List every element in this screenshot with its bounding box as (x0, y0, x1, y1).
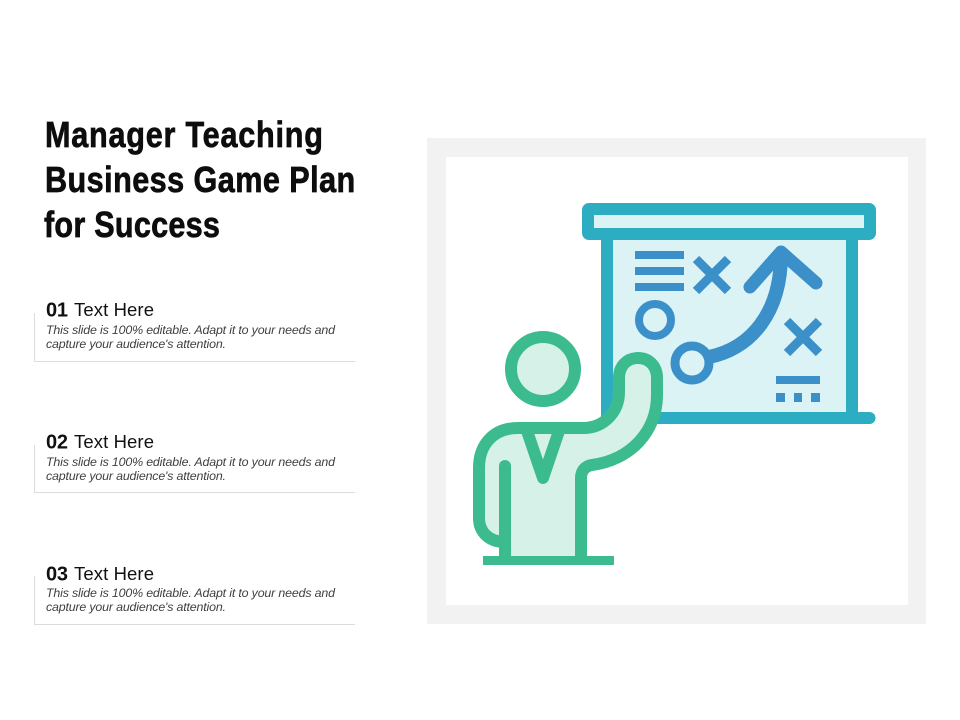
text block 01: 01 (46, 300, 68, 322)
title: Manager Teaching (45, 116, 323, 156)
text block 03 (34, 563, 355, 624)
play arrow (709, 252, 816, 357)
body outline (479, 358, 657, 557)
text block 02: capture your audience's attention. (46, 469, 226, 483)
tie (526, 428, 560, 478)
circle start marker (675, 346, 709, 380)
text block 02: Text Here (74, 431, 154, 452)
dash and dots (776, 376, 820, 402)
text block 02: This slide is 100% editable. Adapt it to your needs and (46, 455, 336, 469)
screen board (607, 234, 870, 418)
circle marker (639, 304, 671, 336)
inner arm line (499, 466, 511, 557)
text block 02 (34, 431, 355, 492)
icon: manager figure (479, 337, 657, 565)
base line (483, 556, 614, 565)
text block 03: 03 (46, 564, 68, 586)
text block 03: This slide is 100% editable. Adapt it to your needs and (46, 586, 336, 600)
text block 02: 02 (46, 432, 68, 454)
body fill (505, 500, 581, 557)
title (44, 116, 355, 246)
cross mark right (787, 321, 819, 353)
text block 01 (34, 299, 355, 362)
text block 03: Text Here (74, 563, 154, 584)
game plan list lines (635, 255, 684, 287)
head (511, 337, 575, 401)
text block 01: Text Here (74, 299, 154, 320)
text block 01: This slide is 100% editable. Adapt it to your needs and (46, 323, 336, 337)
panel: image frame (427, 138, 926, 624)
screen roller bar (588, 209, 870, 234)
title: for Success (44, 206, 220, 246)
title: Business Game Plan (45, 161, 355, 201)
text block 01: capture your audience's attention. (46, 337, 226, 351)
icon: presentation screen (588, 209, 870, 418)
text block 03: capture your audience's attention. (46, 600, 226, 614)
cross mark top (696, 259, 728, 291)
